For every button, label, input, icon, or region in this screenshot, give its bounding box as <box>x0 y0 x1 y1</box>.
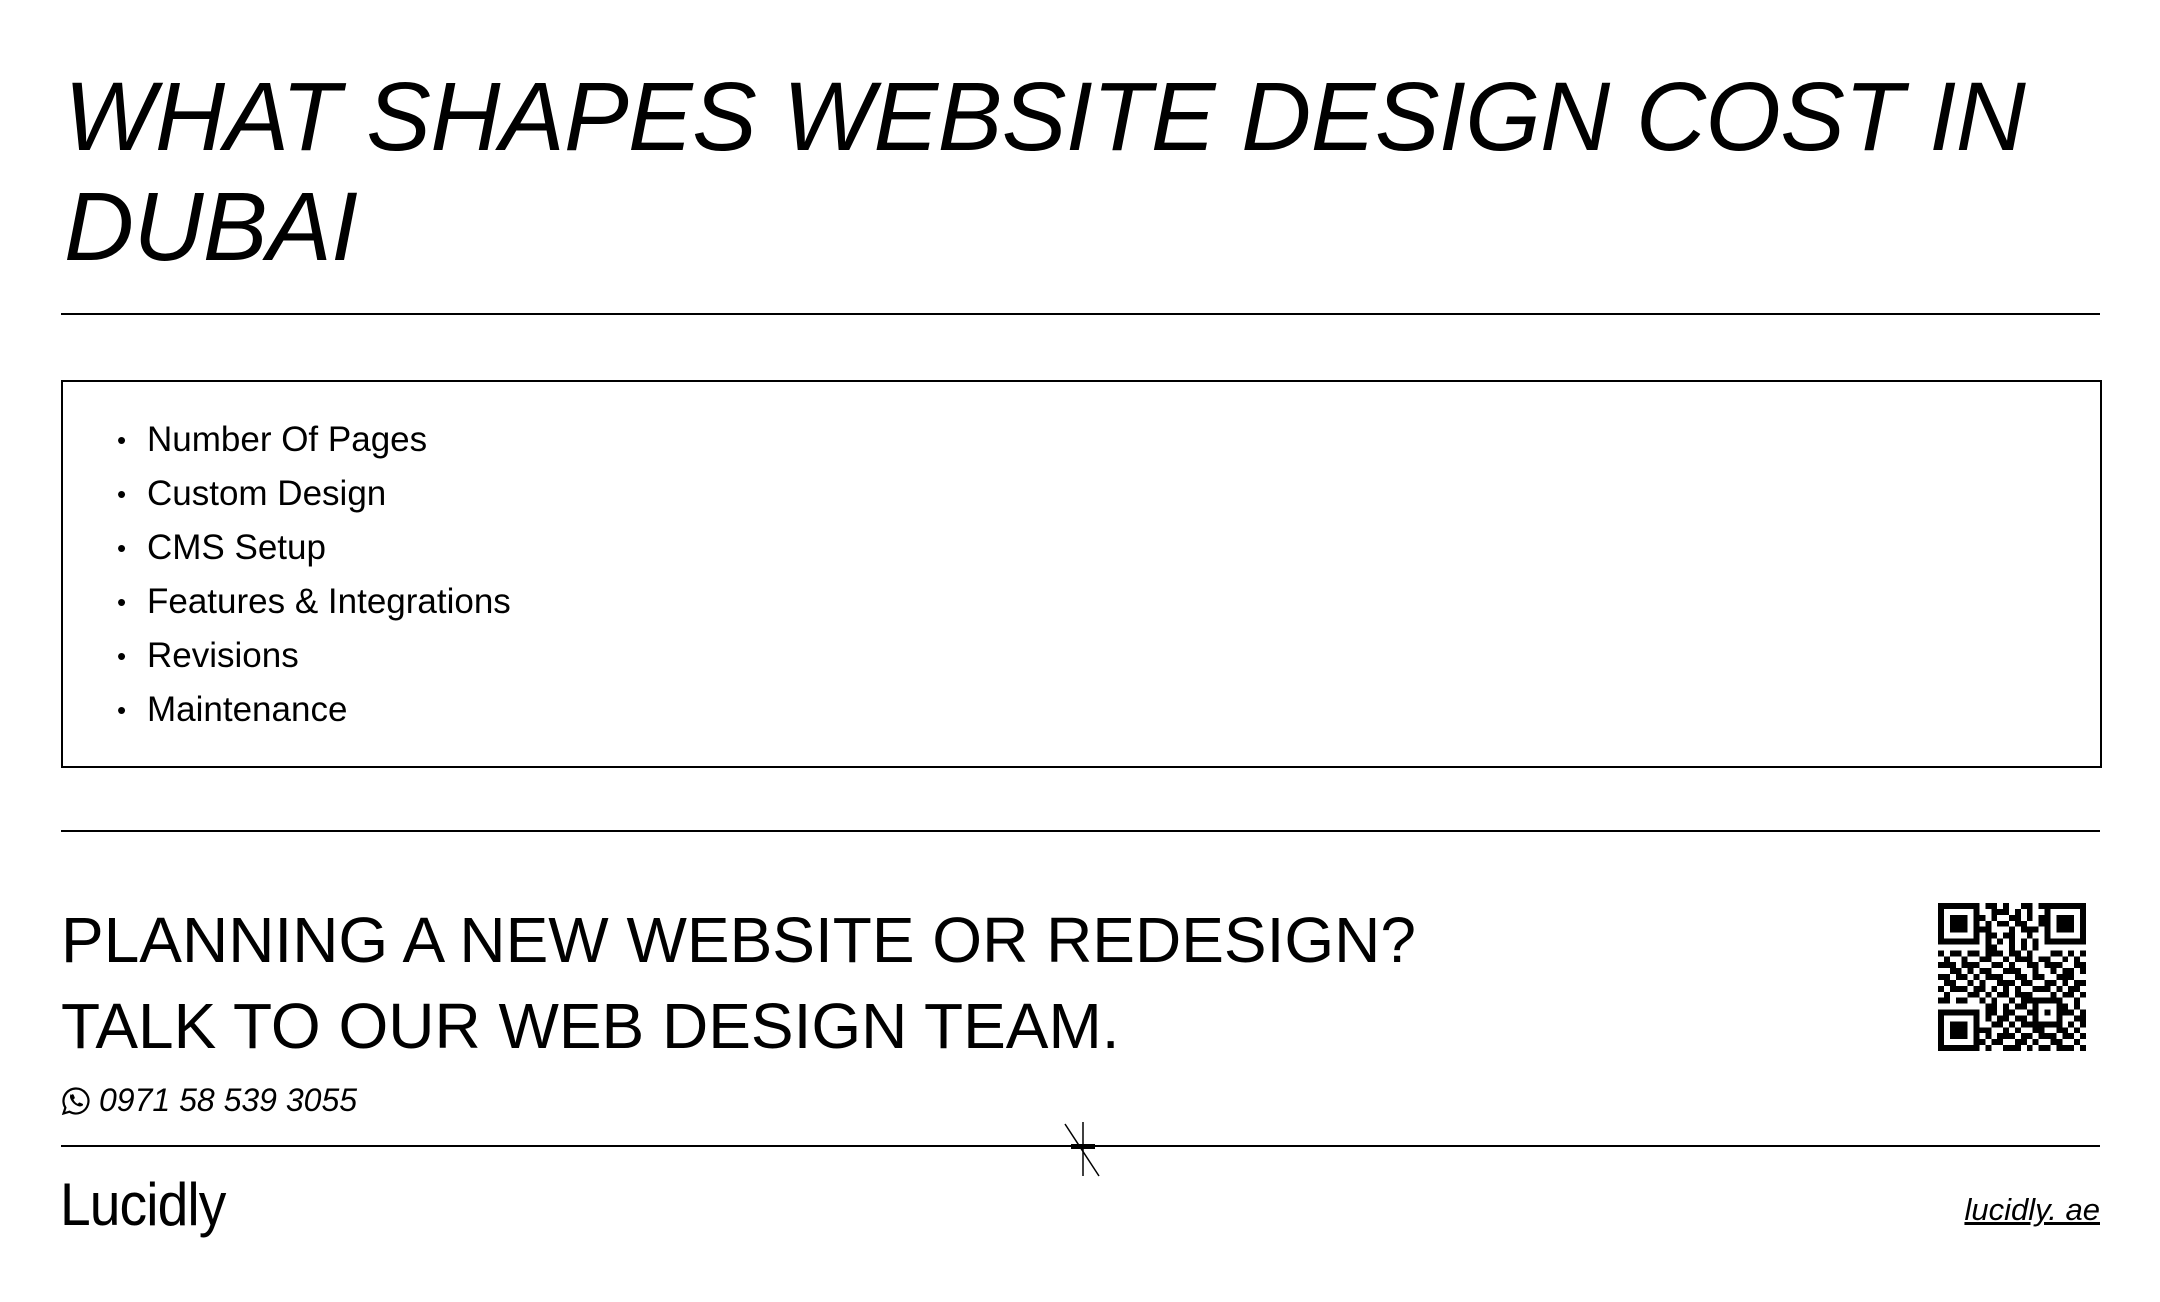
list item: • <box>117 533 126 563</box>
list item: Maintenance <box>147 690 347 729</box>
list item: Number Of Pages <box>147 420 427 459</box>
title: WHAT SHAPES WEBSITE DESIGN COST IN <box>64 62 2025 171</box>
phone contact: 0971 58 539 3055 <box>99 1082 357 1118</box>
logo: Lucidly <box>60 1171 225 1238</box>
title: DUBAI <box>64 172 357 281</box>
list item: • <box>117 587 126 617</box>
title <box>64 62 2026 281</box>
QR code <box>1938 903 2086 1051</box>
list item: Revisions <box>147 636 299 675</box>
icon: cross mark <box>1064 1122 1100 1176</box>
list item: CMS Setup <box>147 528 326 567</box>
list item: • <box>117 479 126 509</box>
list item: • <box>117 425 126 455</box>
list item: • <box>117 695 126 725</box>
panel: cost factors list <box>61 380 2102 768</box>
list item: Features & Integrations <box>147 582 511 621</box>
list item: Custom Design <box>147 474 386 513</box>
call to action heading: PLANNING A NEW WEBSITE OR REDESIGN? <box>61 904 1416 976</box>
call to action heading: TALK TO OUR WEB DESIGN TEAM. <box>61 990 1120 1062</box>
website link: lucidly. ae <box>1964 1192 2100 1227</box>
list item: • <box>117 641 126 671</box>
call to action heading <box>61 904 1416 1062</box>
